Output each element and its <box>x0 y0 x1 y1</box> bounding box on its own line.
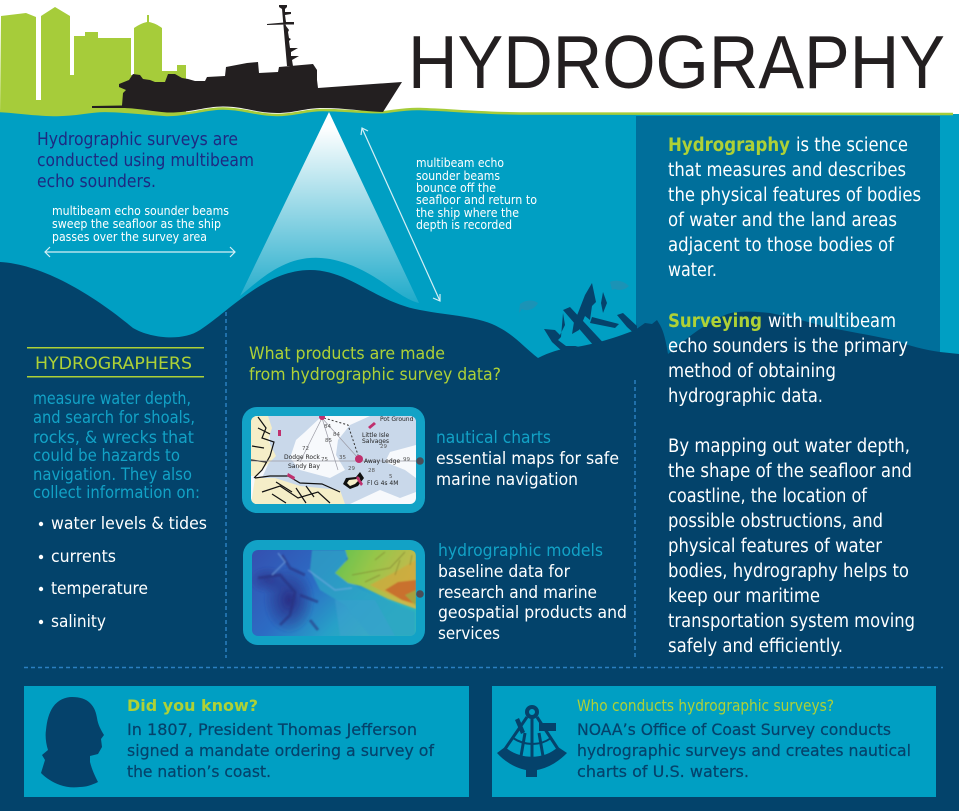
did you know text: Did you know? <box>127 696 258 715</box>
mapping paragraph: coastline, the location of <box>668 486 867 507</box>
products question: What products are made <box>249 344 445 364</box>
nautical charts label: marine navigation <box>436 470 578 489</box>
nautical charts label: nautical charts <box>436 428 551 447</box>
nautical chart image: 99 <box>403 457 410 463</box>
surveying definition: method of obtaining <box>668 361 836 382</box>
nautical chart image: 35 <box>339 455 346 461</box>
collected data list: salinity <box>51 612 106 632</box>
icon: Jefferson silhouette <box>41 697 104 787</box>
sweep caption: sweep the seafloor as the ship <box>52 216 221 231</box>
hydrographers text: collect information on: <box>33 483 200 503</box>
ship silhouette <box>92 5 402 113</box>
hydrographic models label: services <box>438 624 500 643</box>
hydrography definition: the physical features of bodies <box>668 185 921 206</box>
intro text: conducted using multibeam <box>37 150 254 171</box>
bounce caption: seafloor and return to <box>416 192 537 207</box>
mapping paragraph: bodies, hydrography helps to <box>668 561 909 582</box>
nautical chart image: 85 <box>325 438 332 444</box>
hydrographers text: rocks, & wrecks that <box>33 428 194 448</box>
bounce caption: depth is recorded <box>416 217 512 232</box>
depth arrow <box>361 128 440 301</box>
nautical charts label: essential maps for safe <box>436 449 619 468</box>
seafloor <box>0 262 959 811</box>
bounce caption: sounder beams <box>416 168 500 183</box>
who conducts text <box>577 696 911 781</box>
sweep arrow <box>45 247 235 257</box>
hydrographers text: navigation. They also <box>33 465 192 485</box>
nautical chart image: 84 <box>333 432 340 438</box>
mapping paragraph: transportation system moving <box>668 611 915 632</box>
dashed dividers <box>24 312 943 668</box>
waterline <box>0 108 953 115</box>
collected data list: currents <box>51 547 116 567</box>
model connector dot <box>416 590 424 598</box>
surveying definition: hydrographic data. <box>668 386 823 407</box>
bounce caption: the ship where the <box>416 205 519 220</box>
hydrography definition <box>668 135 921 281</box>
collected data list <box>39 514 207 632</box>
hydrography definition: water. <box>668 260 717 281</box>
bounce caption: multibeam echo <box>416 155 504 170</box>
panel: did you know <box>24 686 469 797</box>
hydrographic models label: hydrographic models <box>438 541 603 560</box>
icon: sextant <box>497 707 567 777</box>
did you know text: signed a mandate ordering a survey of <box>127 741 434 760</box>
shipwreck <box>544 283 637 353</box>
nautical chart image: 29 <box>380 444 387 450</box>
nautical chart image: Dodge Rock <box>284 454 320 461</box>
mapping paragraph: safely and efficiently. <box>668 636 843 657</box>
mapping paragraph: the shape of the seafloor and <box>668 461 912 482</box>
nautical chart image: 84 <box>324 424 331 430</box>
surveying definition <box>668 311 908 407</box>
nautical chart image: 5 <box>389 474 393 480</box>
who conducts text: hydrographic surveys and creates nautical <box>577 741 911 760</box>
mapping paragraph: physical features of water <box>668 536 882 557</box>
nautical chart image: Sandy Bay <box>288 463 320 470</box>
intro text <box>37 129 254 192</box>
nautical chart image: Pot Ground <box>380 416 414 423</box>
mapping paragraph: possible obstructions, and <box>668 511 883 532</box>
nautical chart image: 72 <box>302 446 309 452</box>
nautical charts label <box>436 428 619 489</box>
hydrographers text: measure water depth, <box>33 389 191 409</box>
surveying definition: with multibeam <box>768 311 896 332</box>
right info panel <box>636 116 940 376</box>
sonar beam <box>240 112 419 303</box>
hydrographers heading: HYDROGRAPHERS <box>35 354 192 374</box>
hydrography definition: that measures and describes <box>668 160 906 181</box>
nautical chart image: 75 <box>321 457 328 463</box>
who conducts text: NOAA’s Office of Coast Survey conducts <box>577 720 891 739</box>
hydrography definition: is the science <box>796 135 908 156</box>
products question <box>249 344 501 385</box>
bounce caption: bounce off the <box>416 180 496 195</box>
intro text: Hydrographic surveys are <box>37 129 238 150</box>
hydrographers text <box>33 389 200 503</box>
did you know text: In 1807, President Thomas Jefferson <box>127 720 417 739</box>
collected data list: water levels & tides <box>51 514 207 534</box>
hydrographic models label: research and marine <box>438 583 597 602</box>
nautical chart image: Salvages <box>362 438 389 445</box>
mapping paragraph: By mapping out water depth, <box>668 436 910 457</box>
nautical chart image: Little Isle <box>362 432 390 439</box>
sweep caption <box>52 203 229 244</box>
did you know text: the nation’s coast. <box>127 762 271 781</box>
surveying definition: Surveying <box>668 311 762 332</box>
nautical chart image <box>242 407 425 513</box>
intro text: echo sounders. <box>37 171 156 192</box>
bounce caption <box>416 155 537 232</box>
sweep caption: multibeam echo sounder beams <box>52 203 229 218</box>
did you know text <box>127 696 434 781</box>
nautical chart image: 29 <box>348 466 355 472</box>
mapping paragraph <box>668 436 915 657</box>
products question: from hydrographic survey data? <box>249 365 501 385</box>
sweep caption: passes over the survey area <box>52 229 207 244</box>
hydrography definition: adjacent to those bodies of <box>668 235 894 256</box>
nautical chart image: Away Ledge <box>364 458 400 465</box>
hydrography definition: Hydrography <box>668 135 790 156</box>
collected data list: temperature <box>51 579 148 599</box>
who conducts text: charts of U.S. waters. <box>577 762 749 781</box>
fish <box>519 281 629 313</box>
hydrographic model image <box>243 540 425 645</box>
hydrography definition: of water and the land areas <box>668 210 897 231</box>
surveying definition: echo sounders is the primary <box>668 336 908 357</box>
hydrographic models label <box>438 541 627 643</box>
hydrographic models label: baseline data for <box>438 562 570 581</box>
nautical chart image: Fl G 4s 4M <box>367 480 398 487</box>
hydrographers text: could be hazards to <box>33 446 180 466</box>
chart connector dot <box>416 457 424 465</box>
hydrographic models label: geospatial products and <box>438 603 627 622</box>
nautical chart image: 28 <box>368 468 375 474</box>
panel: who conducts surveys <box>492 686 936 797</box>
who conducts text: Who conducts hydrographic surveys? <box>577 696 834 715</box>
hydrographers text: and search for shoals, <box>33 408 195 428</box>
mapping paragraph: keep our maritime <box>668 586 820 607</box>
white sky background <box>0 0 959 116</box>
green city skyline <box>0 7 186 116</box>
